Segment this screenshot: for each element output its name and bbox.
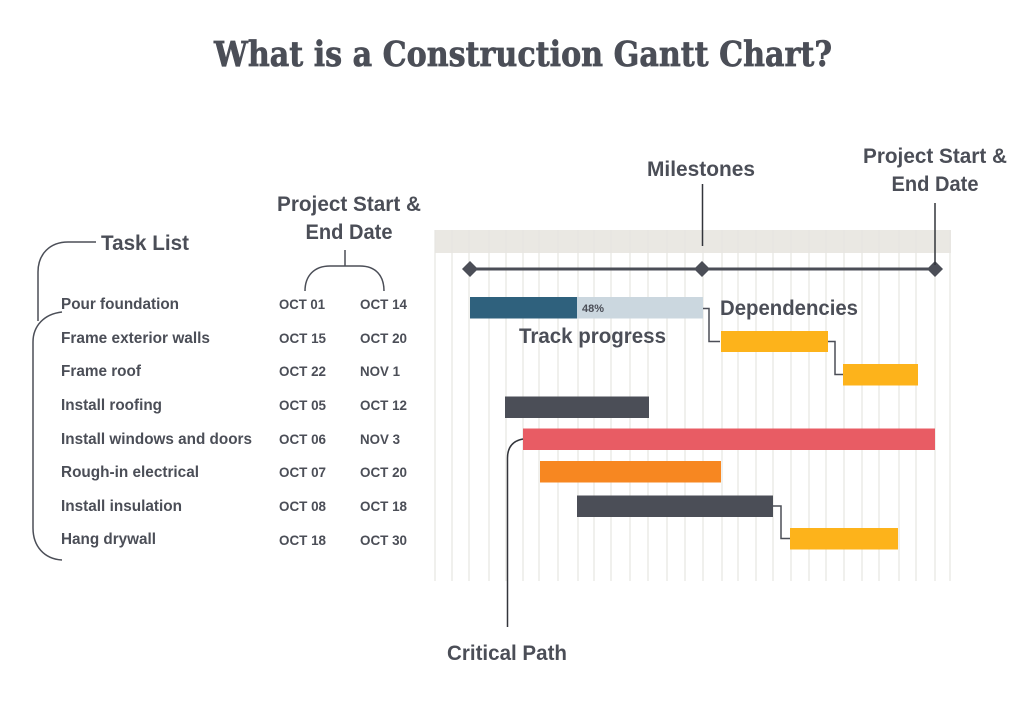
task names: Rough-in electrical [61,464,199,481]
dependency arrow: insulation to drywall [773,506,790,538]
start dates: OCT 15 [279,330,326,346]
task names: Hang drywall [61,531,156,548]
callout: critical path [447,439,567,665]
callout: critical path: Critical Path [447,642,567,665]
end dates: OCT 12 [360,397,407,413]
end dates: OCT 20 [360,464,407,480]
gantt chart grid [435,230,951,581]
task names: Frame exterior walls [61,330,210,347]
dependency arrow: walls to roof [828,342,843,374]
bar: install windows and doors [523,428,935,450]
project timeline with milestones [462,261,943,277]
callout: project start and end date, right: End Date [892,173,978,196]
heading: project start and end date, left: Project Start & [277,193,421,216]
task names [61,296,252,548]
callout: milestones [647,158,755,246]
start dates: OCT 01 [279,296,325,312]
task names: Pour foundation [61,296,179,313]
end dates: NOV 3 [360,431,400,447]
end dates: NOV 1 [360,363,400,379]
dependency arrow: foundation to walls [703,308,720,342]
start dates: OCT 08 [279,498,326,514]
end dates: OCT 20 [360,330,407,346]
callout: project start and end date, right [863,145,1007,265]
task names: Install roofing [61,397,162,414]
label: dependencies: Dependencies [720,297,858,320]
bar: install roofing [505,396,649,418]
label: track progress: Track progress [519,325,666,348]
bar: hang drywall [790,528,898,550]
callout: milestones: Milestones [647,158,755,181]
start dates: OCT 22 [279,363,326,379]
bar: frame exterior walls [721,331,828,352]
callout: project start and end date, right: Project Start & [863,145,1007,168]
end dates: OCT 14 [360,296,407,312]
bar: frame roof [843,364,918,386]
start dates: OCT 05 [279,397,326,413]
heading: project start and end date, left: End Date [306,221,392,244]
progress bar: pour foundation: 48% [582,303,604,315]
bar: install insulation [577,496,773,517]
start dates [279,296,326,548]
bar: rough-in electrical [540,461,721,482]
end dates: OCT 30 [360,532,407,548]
heading: task list with bracket: Task List [101,232,189,255]
progress bar: pour foundation [470,297,703,318]
start dates: OCT 06 [279,431,326,447]
task names: Install windows and doors [61,431,252,448]
heading: task list with bracket [33,232,189,560]
task names: Install insulation [61,498,182,515]
task names: Frame roof [61,363,142,380]
title: What is a Construction Gantt Chart? [213,34,832,75]
end dates [360,296,407,548]
start dates: OCT 18 [279,532,326,548]
heading: project start and end date, left [277,193,421,291]
end dates: OCT 18 [360,498,407,514]
start dates: OCT 07 [279,464,326,480]
